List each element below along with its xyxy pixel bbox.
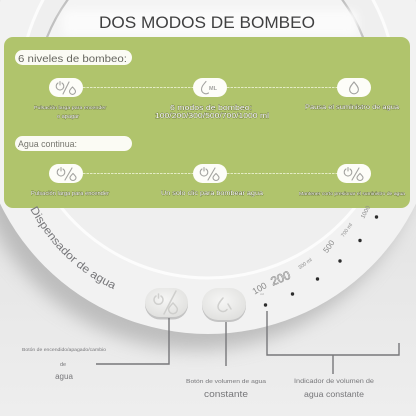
caption: power button: Botón de encendido/apagado/cambio	[22, 347, 106, 352]
volume scale labels: 100	[250, 280, 269, 296]
volume scale labels: 500	[321, 238, 337, 255]
volume scale labels: 200	[269, 268, 293, 289]
icon: water drop, row 1 right	[337, 78, 371, 97]
title: DOS MODOS DE BOMBEO	[99, 14, 315, 32]
volume scale labels: 1000	[360, 205, 372, 220]
heading pill: 6 niveles: 6 niveles de bombeo:	[18, 54, 127, 65]
heading pill: agua continua	[15, 136, 132, 151]
heading pill: agua continua: Agua continua:	[18, 139, 77, 149]
label: six modes: 100/200/300/500/700/1000 ml	[155, 113, 270, 120]
caption: power button	[22, 347, 106, 381]
connector row 1	[83, 86, 337, 88]
icon: power and drop, row 2 center	[193, 164, 227, 183]
caption: volume button: Botón de volumen de agua	[186, 379, 267, 385]
inner ring	[20, 0, 396, 278]
volume indicator dots	[264, 215, 378, 307]
bracket: volume indicator	[267, 311, 399, 374]
icon: power and drop, row 2 right	[337, 164, 371, 183]
icon: power and drop, row 2 left	[49, 164, 83, 183]
caption: power button: de	[60, 362, 66, 368]
icon: volume ml, row 1 center	[193, 78, 227, 97]
volume scale labels	[250, 205, 372, 296]
label: single click: Un solo clic para bombear agua	[161, 190, 263, 197]
caption: volume indicator	[294, 378, 374, 399]
label: pause: Pausa el suministro de agua	[305, 104, 400, 111]
volume scale labels: ml	[260, 292, 264, 296]
dispenser disc shadow	[0, 204, 416, 358]
label: six modes	[155, 103, 270, 120]
caption: volume indicator: agua constante	[304, 390, 365, 399]
leader: volume button	[225, 322, 227, 366]
panel: bombeo modes	[4, 37, 410, 208]
button: constant volume	[202, 288, 246, 322]
leader: power button	[96, 318, 169, 364]
heading pill: 6 niveles	[15, 50, 132, 65]
label: short press: Mantener corto presionar el suministro de agua	[299, 191, 405, 196]
top gray ring	[46, 0, 364, 37]
label: long press: Pulsación larga para encender	[31, 191, 109, 197]
label: six modes: 6 modos de bombeo:	[170, 103, 252, 112]
connector row 2	[83, 172, 337, 174]
label: power button: o apagar	[57, 114, 79, 120]
caption: volume button	[186, 379, 267, 399]
icon: power and drop, row 1 left	[49, 78, 83, 97]
title band	[62, 10, 358, 36]
caption: power button: agua	[55, 372, 73, 381]
label: power button	[34, 105, 107, 120]
volume scale labels: 300 ml	[297, 257, 314, 271]
label: dispensador de agua: Dispensador de agua	[30, 206, 115, 290]
volume scale labels: 700 ml	[340, 222, 354, 239]
icon: volume ml, row 1 center: ML	[209, 86, 218, 92]
button: power	[145, 288, 188, 320]
caption: volume button: constante	[204, 389, 248, 399]
caption: volume indicator: Indicador de volumen de	[294, 378, 374, 385]
label: power button: Pulsación larga para encender	[34, 105, 107, 110]
